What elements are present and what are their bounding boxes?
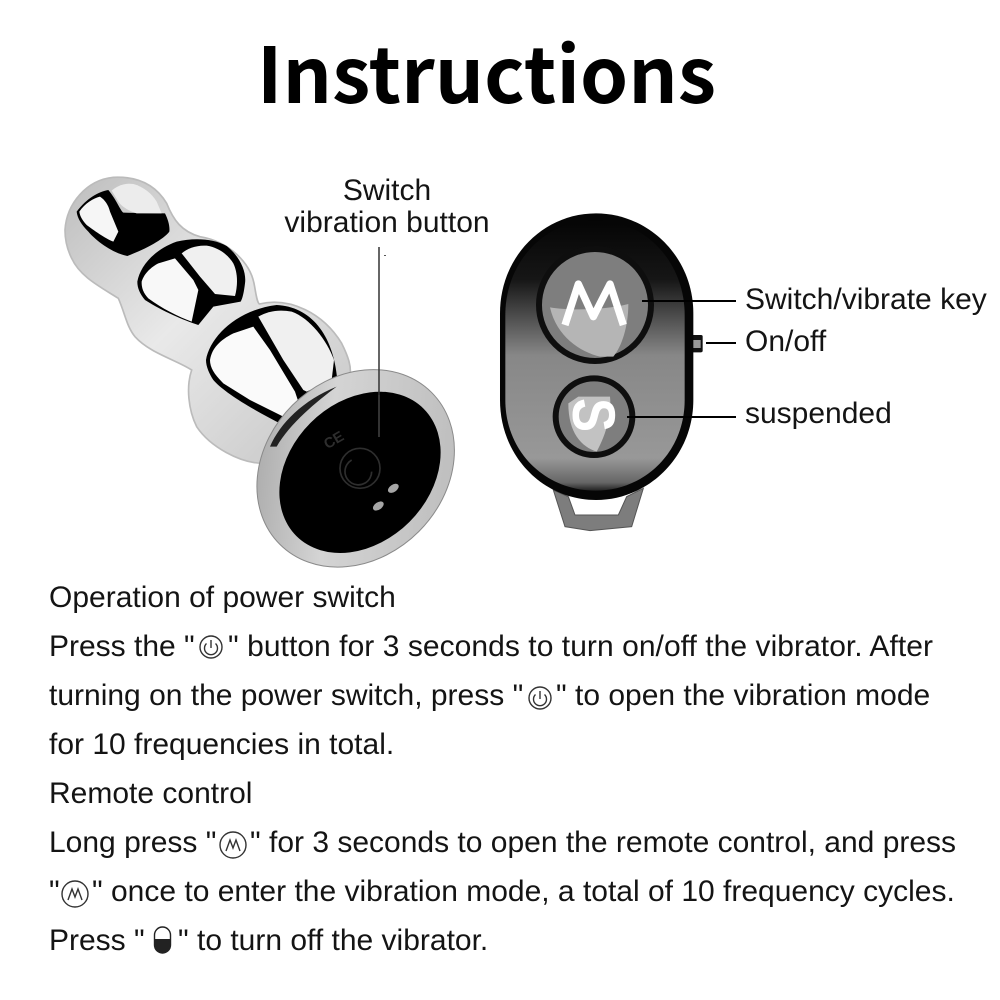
remote side switch <box>691 335 703 352</box>
M button <box>539 249 651 361</box>
text block: remote control: " <box>49 875 60 908</box>
text block: remote control: Press " <box>49 924 145 957</box>
plug body <box>65 177 350 463</box>
callout: suspended: suspended <box>745 397 892 430</box>
label: switch vibration button: vibration button <box>284 206 490 239</box>
flange inner shadow <box>270 387 337 447</box>
text block: remote control: Remote control <box>49 777 252 810</box>
icon: power symbol <box>529 687 551 709</box>
ball 2 reflection <box>137 239 245 325</box>
remote shell <box>500 213 693 500</box>
callout: on/off: On/off <box>745 325 827 358</box>
text block: operation of power switch: Press the " <box>49 630 195 663</box>
base flange <box>217 329 495 607</box>
text block: operation of power switch <box>49 581 933 761</box>
text block: operation of power switch: turning on the power switch, press " <box>49 679 523 712</box>
icon: M button <box>220 832 246 858</box>
key ring loop <box>553 488 643 531</box>
text block: remote control: " to turn off the vibrator. <box>178 924 488 957</box>
icon: power symbol <box>200 636 222 658</box>
text block: operation of power switch: for 10 frequencies in total. <box>49 728 394 761</box>
product: metal beaded plug <box>65 177 495 607</box>
product: remote control <box>500 213 703 531</box>
text block: operation of power switch: " button for 3 seconds to turn on/off the vibrator. After <box>228 630 933 663</box>
text block: operation of power switch: " to open the vibration mode <box>556 679 930 712</box>
icon: M button <box>62 881 88 907</box>
text block: remote control <box>49 777 956 957</box>
callout: switch/vibrate key: Switch/vibrate key <box>745 283 987 316</box>
callout: on/off <box>706 325 827 358</box>
text block: remote control: " once to enter the vibration mode, a total of 10 frequency cycles. <box>92 875 955 908</box>
icon: lock / suspend <box>154 927 170 953</box>
S button <box>556 378 632 455</box>
contact dots <box>371 482 400 512</box>
remote face <box>505 220 685 491</box>
black base plate <box>247 359 473 585</box>
switch symbol on base <box>321 429 380 488</box>
label: switch vibration button <box>284 174 490 437</box>
text block: operation of power switch: Operation of power switch <box>49 581 396 614</box>
ball 1 reflection <box>77 184 169 256</box>
ball 3 reflection <box>206 305 337 425</box>
switch symbol on base: CE <box>321 429 347 453</box>
S button: S <box>560 398 627 432</box>
text block: remote control: Long press " <box>49 826 216 859</box>
title: Instructions <box>257 15 716 126</box>
label: switch vibration button: Switch <box>343 174 431 207</box>
text block: remote control: " for 3 seconds to open the remote control, and press <box>250 826 956 859</box>
